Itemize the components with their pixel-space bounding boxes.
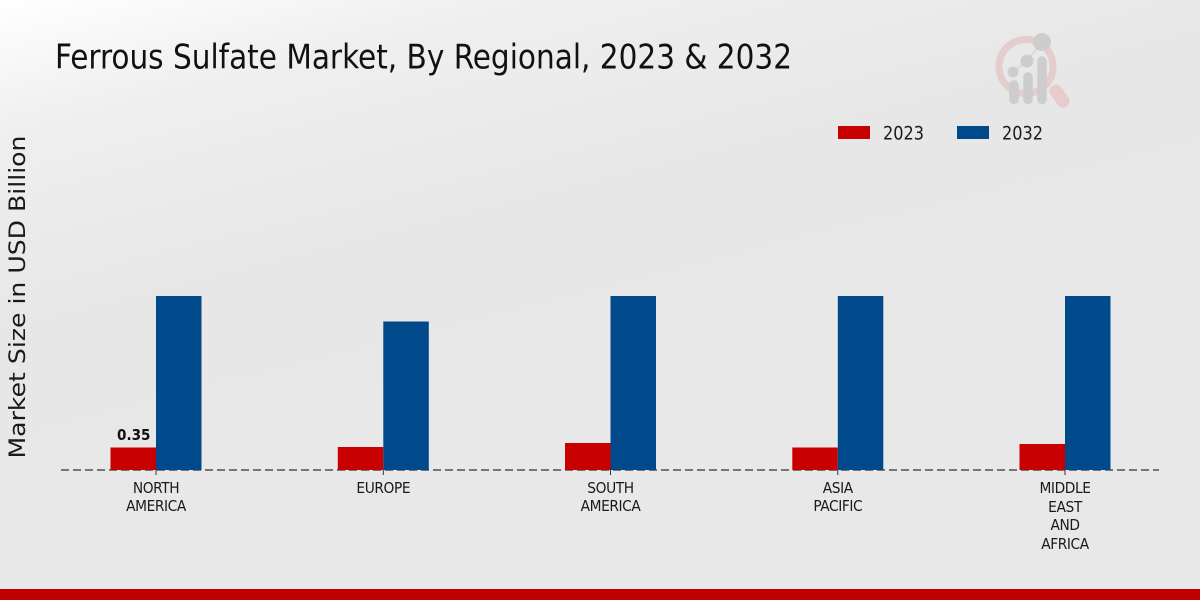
category label: Middle East and Africa: AND [1050, 516, 1080, 534]
legend item: 2032: 2032 [1002, 122, 1043, 144]
tick marks [156, 470, 1065, 475]
category label: South America: AMERICA [581, 497, 641, 515]
legend item: 2023: 2023 [883, 122, 924, 144]
category label: South America: SOUTH [587, 479, 634, 497]
legend item: 2023 [838, 122, 924, 144]
bar chart [61, 296, 1159, 475]
bars: Europe [338, 322, 429, 470]
category label: Middle East and Africa: EAST [1048, 498, 1083, 516]
bars: Middle East and Africa [1020, 296, 1110, 470]
bars: South America [565, 296, 656, 470]
category label: Asia Pacific: ASIA [823, 479, 854, 497]
bars: North America [110, 296, 202, 470]
category label: Asia Pacific: PACIFIC [813, 497, 862, 515]
title: Ferrous Sulfate Market, By Regional, 2023 & 2032 [55, 38, 792, 78]
baseline [61, 469, 1159, 471]
legend [838, 122, 1043, 144]
y axis label: Market Size in USD Billion [5, 136, 31, 458]
footer bar [0, 589, 1200, 600]
legend item: 2032 [957, 122, 1043, 144]
category label: Middle East and Africa: MIDDLE [1039, 479, 1091, 497]
bars: Asia Pacific [792, 296, 883, 470]
icon: magnifier logo watermark [999, 33, 1063, 101]
value label: 0.35 [117, 426, 150, 444]
category label: Middle East and Africa: AFRICA [1041, 535, 1090, 553]
category label: North America: AMERICA [126, 497, 187, 515]
category label: Europe: EUROPE [356, 479, 410, 497]
category label: North America: NORTH [133, 479, 179, 497]
